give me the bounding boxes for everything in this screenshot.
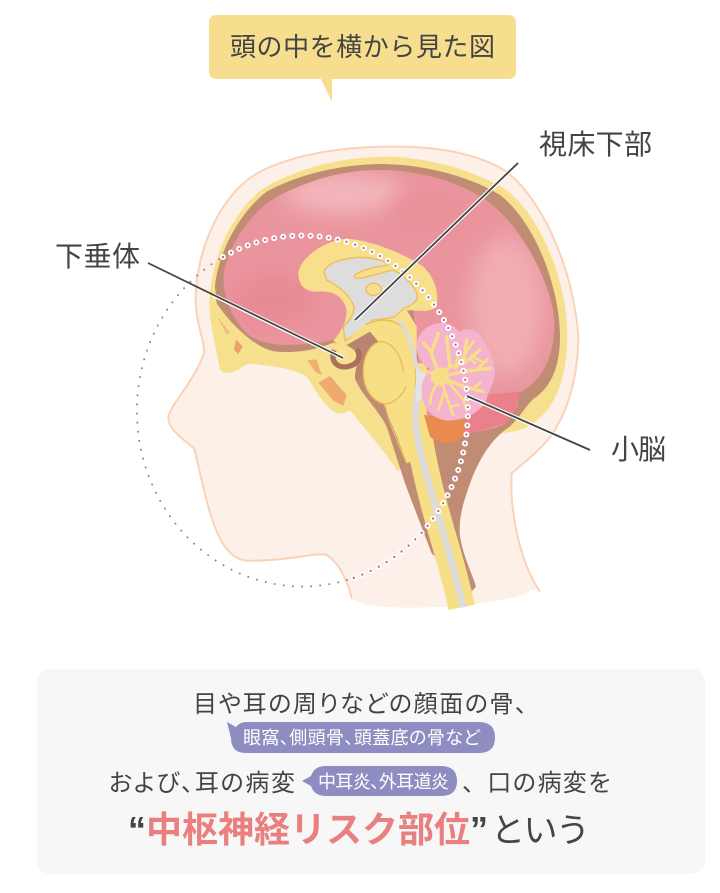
head illustration	[137, 147, 578, 608]
cerebellum	[417, 323, 495, 421]
label: cerebellum: 小脳	[611, 434, 666, 465]
arbor vitae	[423, 333, 490, 415]
text line 2 left: および、耳の病変	[109, 770, 295, 797]
third ventricle	[324, 257, 417, 341]
pill: facial bones: 眼窩、側頭骨、頭蓋底の骨など	[243, 728, 481, 748]
title: 頭の中を横から見た図	[230, 32, 495, 62]
pill: ear diseases: 中耳炎、外耳道炎	[318, 772, 449, 792]
pill: facial bones	[227, 722, 495, 753]
sphenoid block	[347, 332, 378, 380]
cerebrum shading	[230, 173, 543, 437]
spine canal	[417, 417, 462, 607]
skull	[209, 157, 567, 472]
corpus callosum	[298, 239, 437, 367]
definition panel	[37, 669, 705, 874]
spinal cord	[416, 383, 463, 607]
pituitary	[333, 349, 359, 367]
head skin	[168, 147, 578, 608]
dura	[215, 164, 560, 592]
brain stem outline	[365, 320, 419, 463]
key term: 中枢神経リスク部位	[146, 809, 470, 850]
text line 2 right: 、口の病変を	[462, 770, 612, 797]
quote close: ”	[470, 809, 488, 850]
thalamic nucleus	[366, 283, 381, 295]
label: hypothalamus: 視床下部	[539, 129, 652, 160]
head outline	[168, 147, 578, 598]
aqueduct	[399, 320, 417, 370]
upper canal fill	[413, 363, 427, 423]
fourth ventricle	[416, 368, 432, 403]
orange sinuses	[217, 317, 467, 443]
brain stem	[348, 320, 419, 463]
leader line: pituitary	[148, 263, 343, 358]
cerebrum	[223, 170, 554, 433]
pituitary gland	[339, 351, 349, 360]
leader line: hypothalamus	[355, 163, 518, 320]
dotted circle: inner highlighted part	[223, 236, 468, 580]
quote open: “	[128, 809, 146, 850]
pons	[363, 342, 406, 404]
leader line: cerebellum	[467, 396, 590, 450]
text line 1: 目や耳の周りなどの顔面の骨、	[193, 691, 527, 718]
text line 3 end: という	[491, 812, 590, 850]
label: pituitary: 下垂体	[55, 241, 140, 272]
title bubble	[209, 15, 516, 102]
dotted circle: outer part	[137, 257, 347, 586]
pill: ear diseases	[302, 766, 457, 796]
